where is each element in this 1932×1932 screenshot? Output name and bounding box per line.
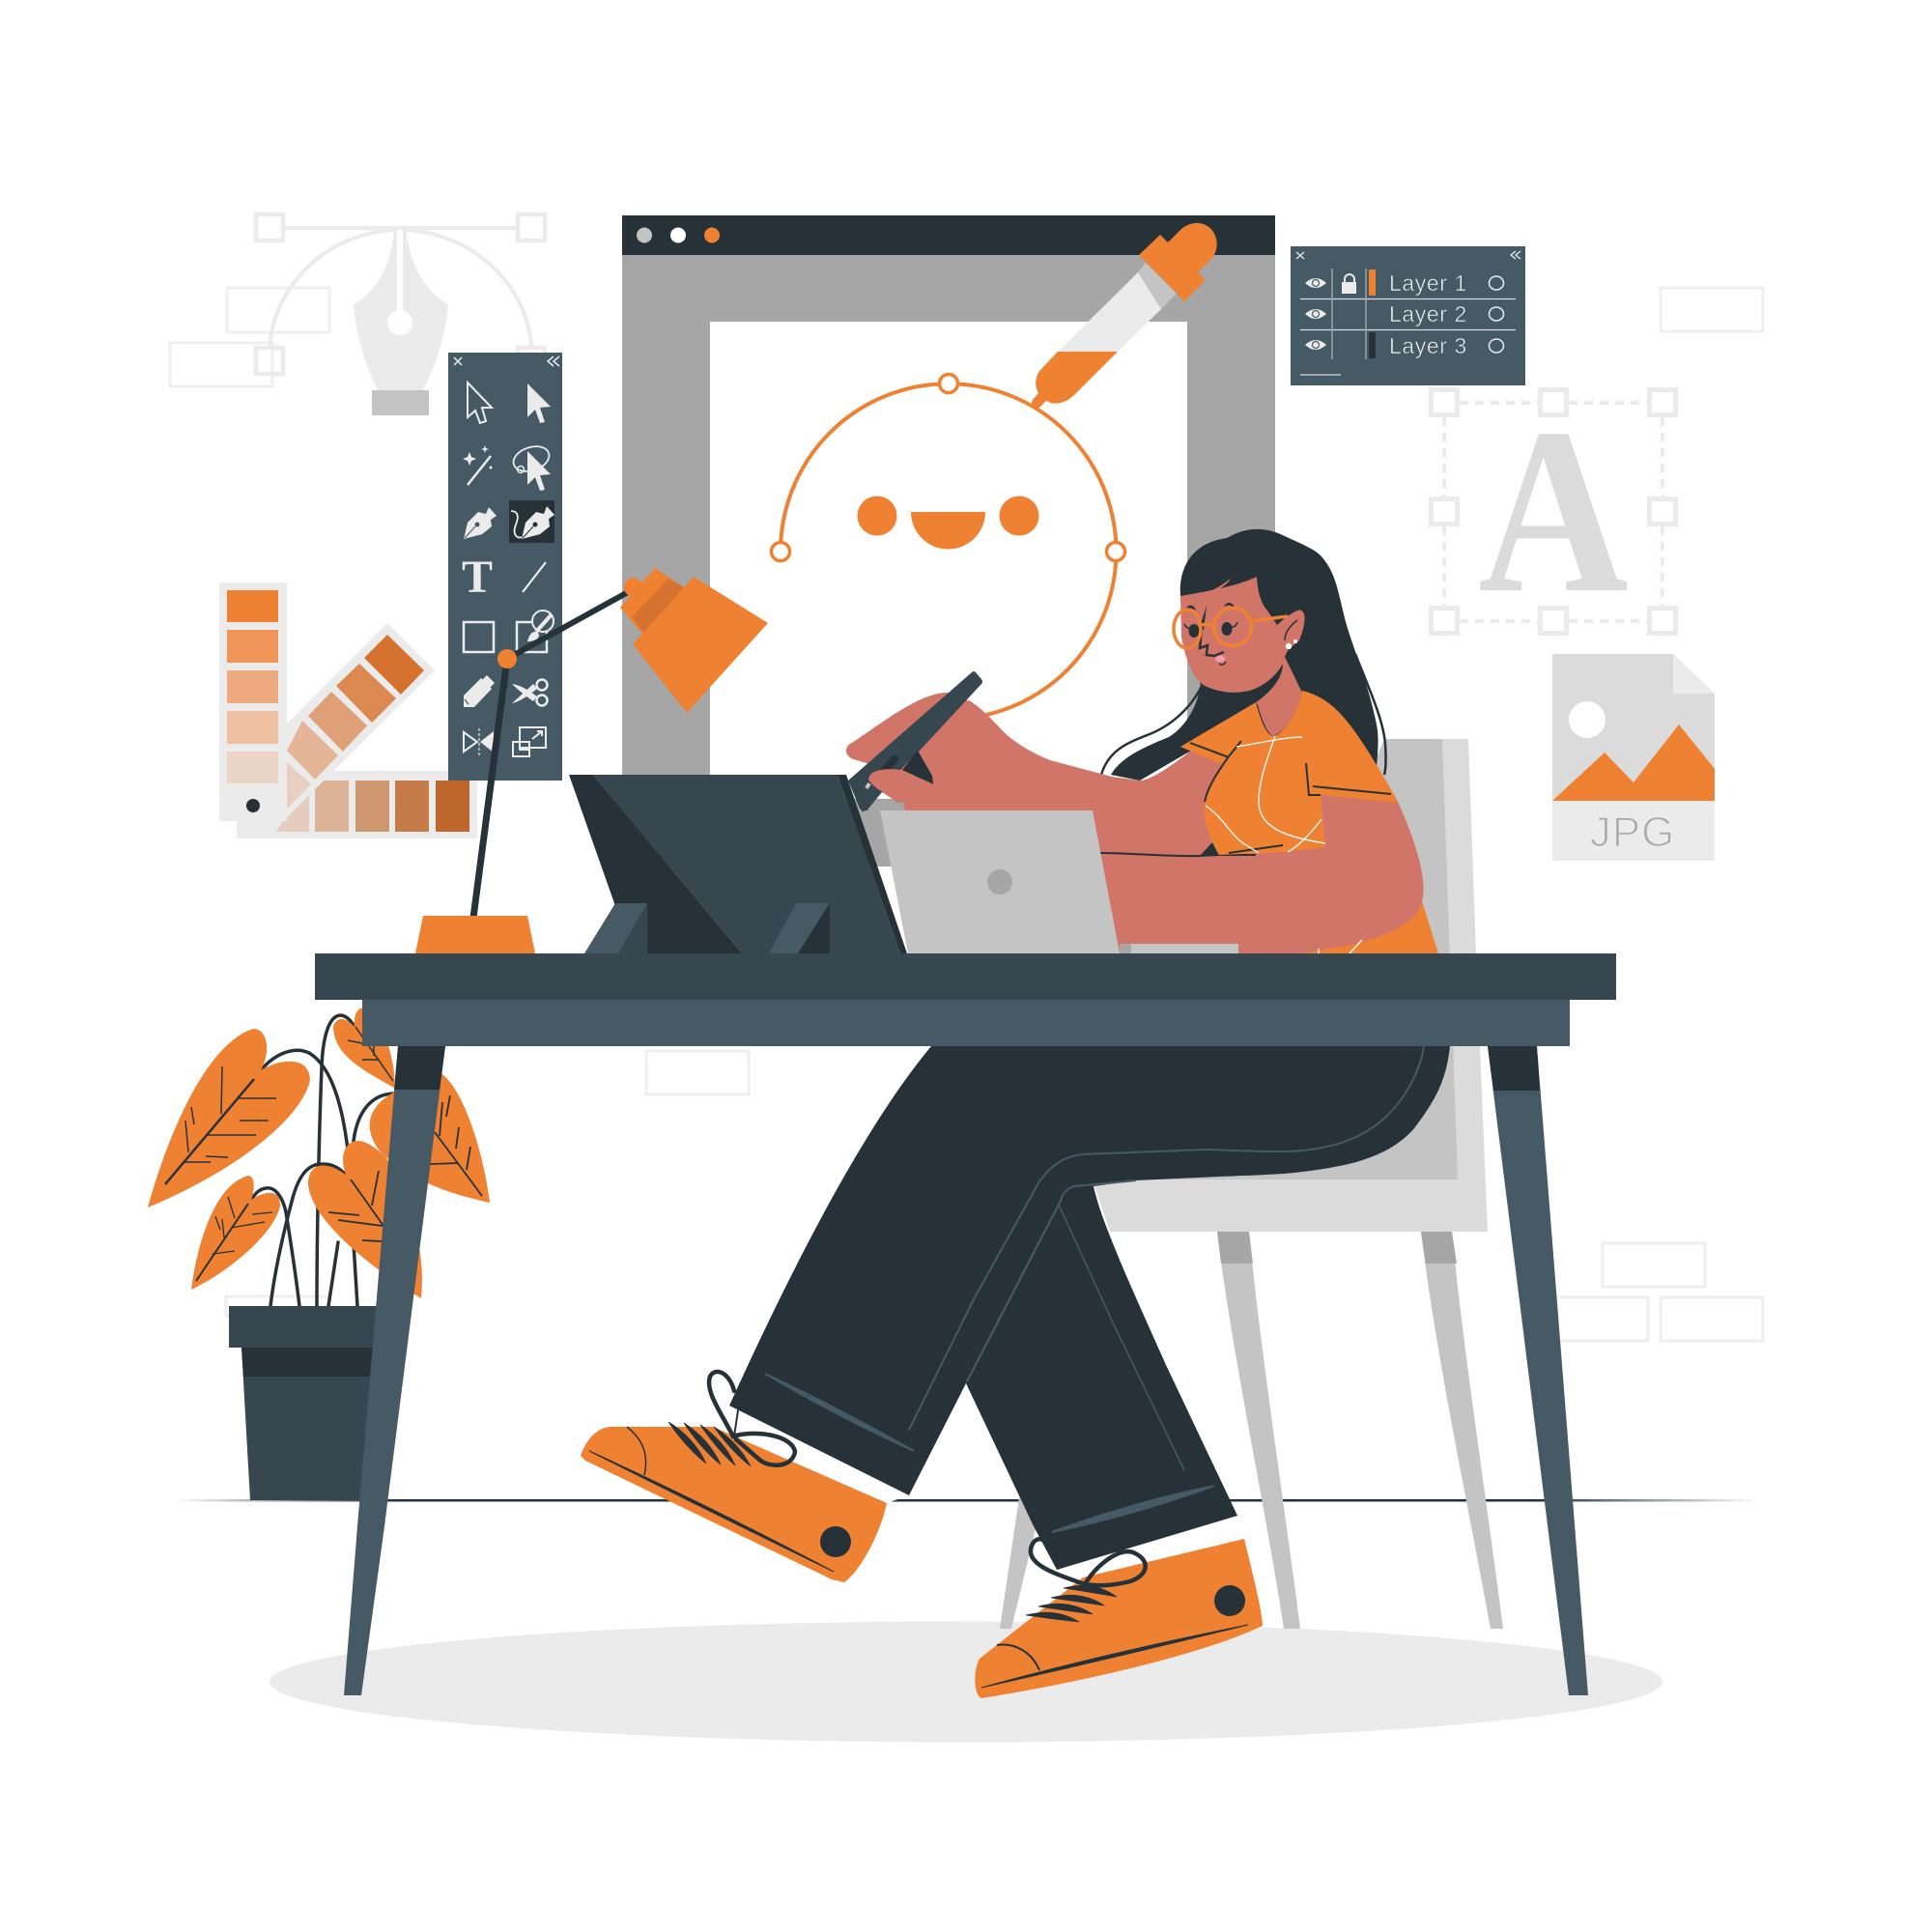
arm and hand (846, 693, 1423, 953)
plant pot (229, 1306, 379, 1500)
desk (315, 953, 1616, 1695)
left shoe (581, 1372, 909, 1582)
layer names (1389, 270, 1467, 358)
design app window (622, 215, 1275, 867)
icon: curvature pen selected (509, 500, 554, 543)
swatch fan (218, 582, 477, 838)
layer names: Layer 2 (1389, 301, 1467, 327)
selected letter A: A (1478, 379, 1629, 641)
smiley vector drawing on canvas (771, 375, 1124, 715)
potted plant (148, 1008, 490, 1500)
icon: rectangle tool (464, 622, 494, 652)
icon: lasso arrow (510, 442, 553, 491)
icon: scissors (512, 680, 547, 705)
icon: type tool: T (462, 552, 493, 603)
layer names: Layer 3 (1389, 333, 1467, 358)
leaf: small left (191, 1176, 280, 1290)
face and neck (1174, 577, 1305, 736)
background outline rectangles (170, 288, 1763, 1341)
desk lamp (415, 568, 768, 953)
icon: pencil (464, 675, 495, 707)
selected letter A (1432, 379, 1675, 641)
leaf: top (333, 1008, 394, 1088)
icon: pen (464, 507, 497, 539)
glasses (1174, 609, 1288, 648)
chair (1000, 739, 1503, 1629)
woman's hair (1101, 529, 1386, 781)
icon: scale (513, 727, 546, 756)
leaf: right (370, 1074, 490, 1203)
drawing tablet (569, 775, 907, 953)
icon: arrow outline (468, 383, 492, 423)
floor line (174, 1499, 1758, 1501)
layer names: Layer 1 (1389, 270, 1467, 296)
stylus pen (848, 671, 982, 814)
lock icon (1342, 274, 1356, 294)
icon: line tool (523, 562, 546, 592)
leaf: large left (148, 1029, 310, 1208)
JPG file icon: JPG (1590, 809, 1675, 856)
leaf: center (308, 1141, 422, 1298)
right shoe (975, 1516, 1263, 1698)
icon: paintbrush (517, 611, 554, 652)
layers panel (1291, 246, 1525, 385)
floor shadow (270, 1621, 1662, 1743)
icon: arrow solid (527, 384, 551, 423)
laptop (863, 802, 1238, 953)
icon: reflect (464, 728, 494, 755)
pen tool illustration (256, 214, 545, 415)
lower torso (1294, 901, 1438, 953)
icon: magic wand (463, 445, 493, 485)
JPG file icon (1552, 654, 1715, 861)
layer visibility eyes (1305, 278, 1326, 350)
tools panel (448, 353, 562, 781)
pants (729, 1046, 1450, 1570)
eyedropper (1032, 223, 1217, 409)
shirt (1180, 691, 1399, 953)
facial features (1184, 603, 1297, 665)
